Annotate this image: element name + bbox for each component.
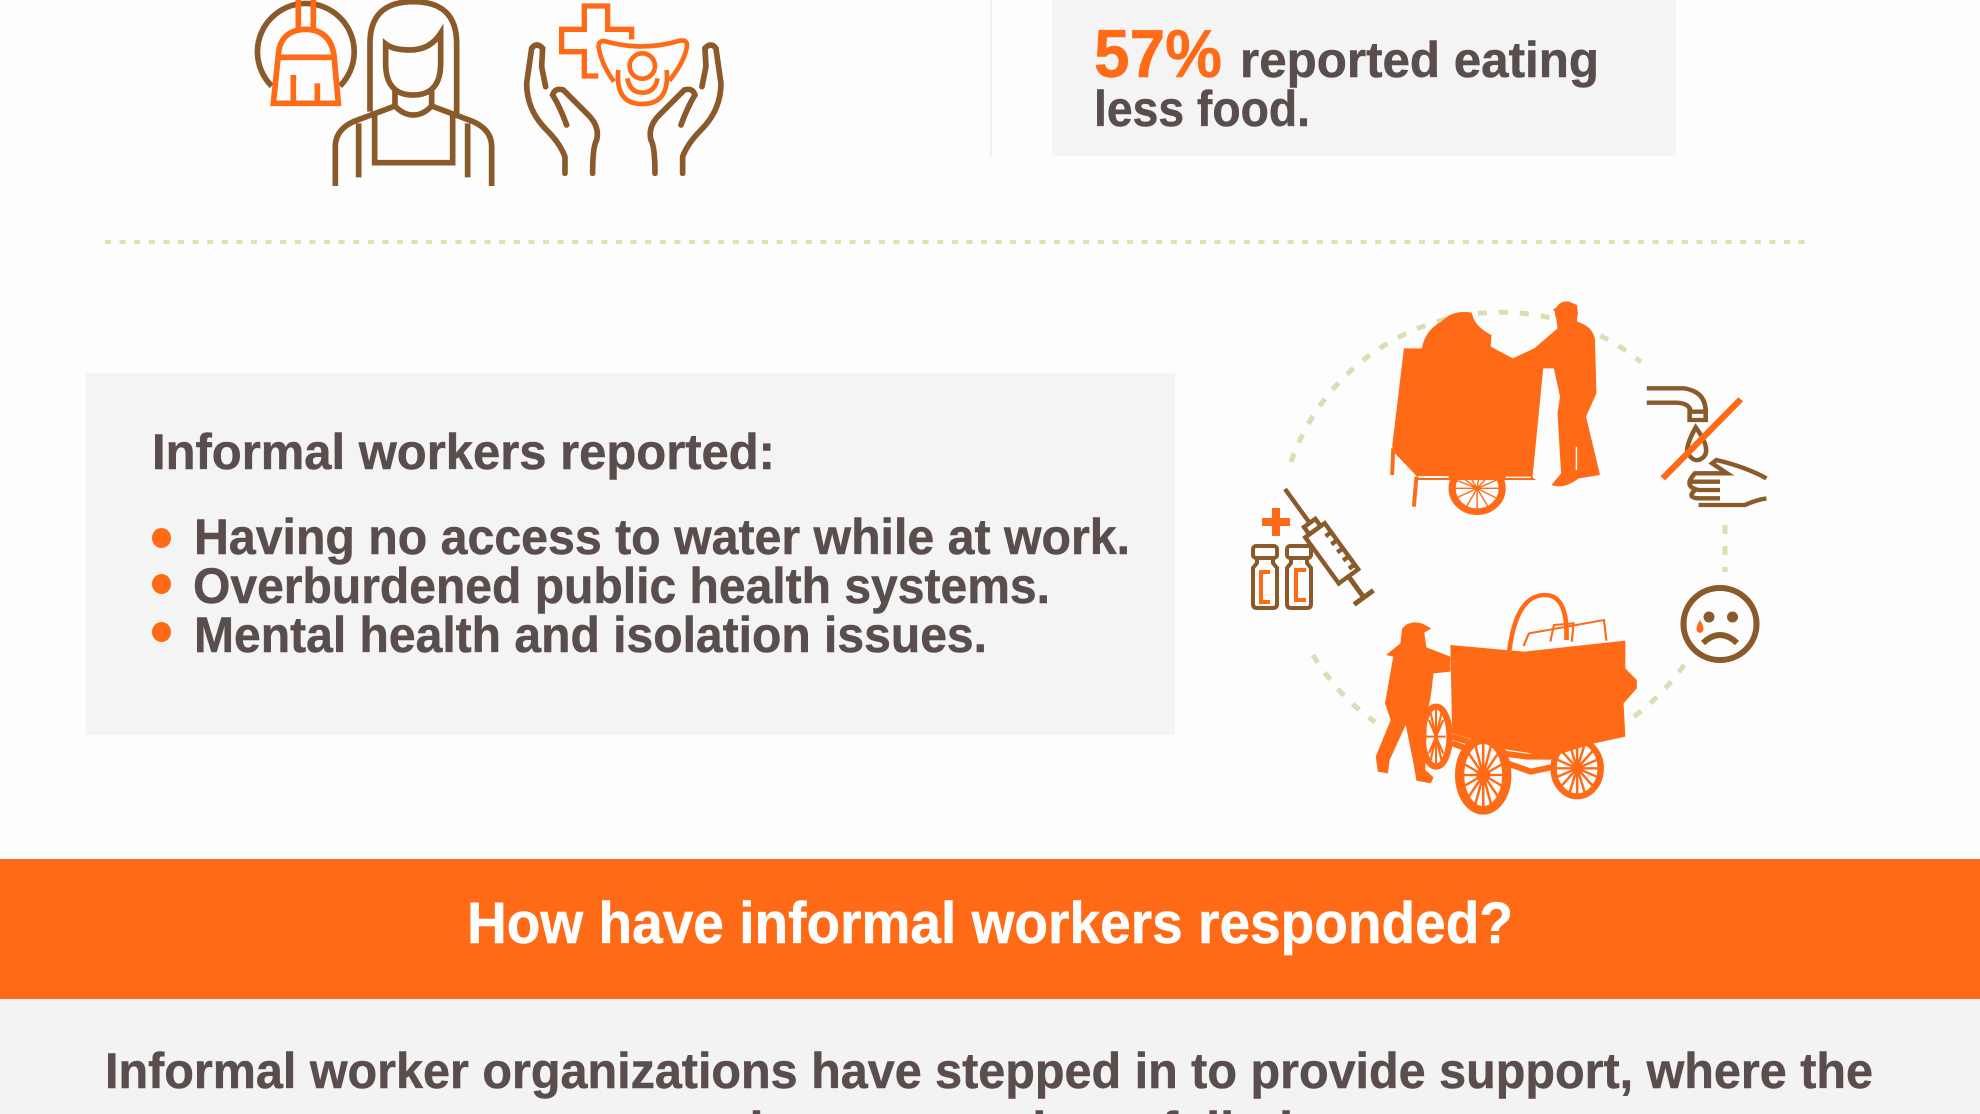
panel: eating less food [1052, 0, 1676, 156]
text: less food: less food. [1094, 81, 1310, 137]
icon: sad face [1684, 588, 1756, 660]
heading: informal workers reported: Informal workers reported: [152, 424, 775, 480]
panel: informal workers reported [86, 373, 1175, 735]
banner: how have informal workers responded: How have informal workers responded? [467, 891, 1513, 956]
icon: vials [1253, 546, 1311, 608]
silhouette: waste picker with cart [1392, 301, 1600, 512]
text: reported eating: reported eating [1240, 32, 1599, 88]
list item: health systems: Overburdened public health systems. [193, 558, 1050, 614]
icon: hands holding cross and mask [527, 6, 721, 173]
icon: medical cross [1262, 508, 1290, 536]
illustration: circle of informal workers and health risks [1253, 301, 1766, 811]
stat: 57%: 57% [1094, 16, 1222, 92]
icon: no water for handwashing [1647, 388, 1766, 505]
dashed ring [1291, 312, 1725, 722]
silhouette: vendor with pedal cart [1376, 595, 1637, 811]
text: organizations stepped in: Informal worker organizations have stepped in to provide support, where the [105, 1043, 1873, 1099]
list item: mental health: Mental health and isolation issues. [194, 607, 987, 663]
icon: broom in circle [257, 0, 354, 103]
icon: syringe [1275, 482, 1373, 604]
icon: woman worker [335, 2, 492, 186]
list item: water: Having no access to water while at work. [194, 509, 1130, 565]
banner: how have informal workers responded [0, 859, 1980, 999]
icons: domestic worker and health care [257, 0, 721, 186]
panel: response text [0, 999, 1980, 1114]
